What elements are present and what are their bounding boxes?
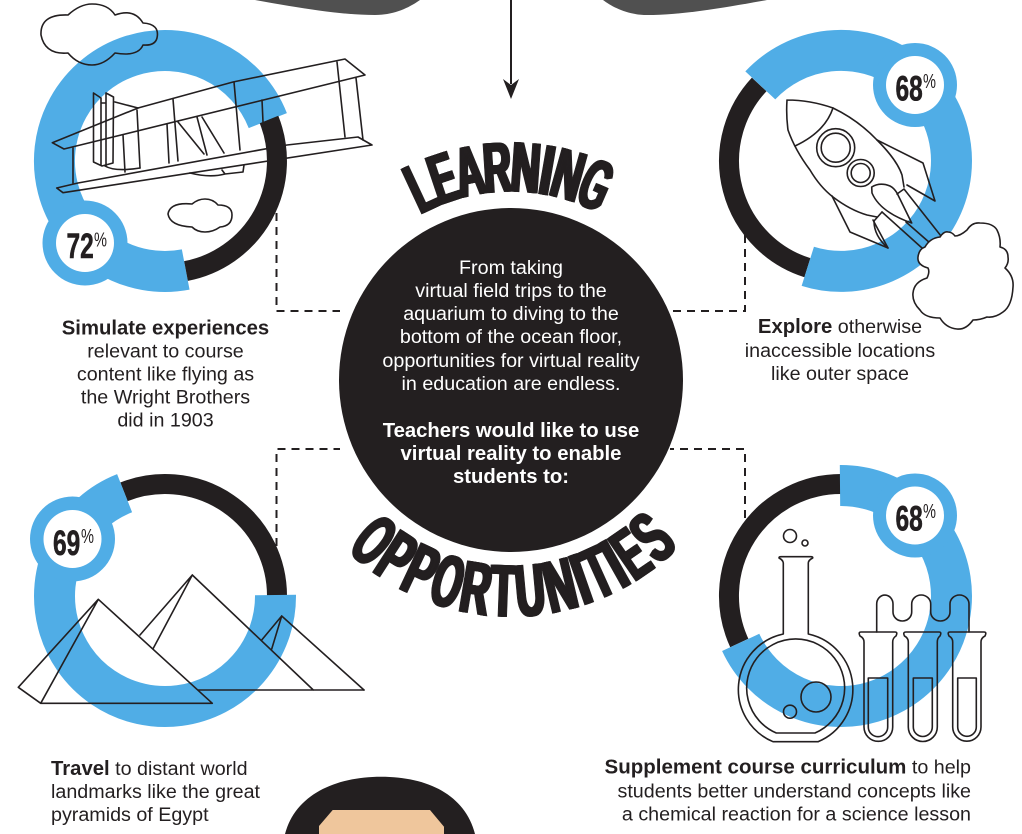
heading: OPPORTUNITIES <box>336 497 690 633</box>
heading: OPPORTUNITIES: P <box>363 515 431 600</box>
ring 68 percent black arc <box>729 484 841 643</box>
lead-in text: students to: <box>453 466 569 488</box>
icon: flask <box>738 530 853 742</box>
intro text: virtual field trips to the <box>415 280 607 302</box>
intro text: opportunities for virtual reality <box>382 350 640 372</box>
arrow pointing down <box>503 0 519 99</box>
text: simulate experiences: did in 1903 <box>117 410 214 432</box>
text: simulate experiences: the Wright Brothers <box>81 386 250 408</box>
text: travel <box>51 758 261 826</box>
badge 68 percent: % <box>923 70 936 93</box>
heading: OPPORTUNITIES: S <box>614 497 690 577</box>
icon: small cloud <box>168 199 232 232</box>
heading: OPPORTUNITIES: P <box>391 528 451 614</box>
lead-in text: Teachers would like to use <box>383 420 639 442</box>
text: supplement: students better understand concepts like <box>617 780 971 802</box>
text: simulate experiences: Simulate experiences <box>62 318 269 340</box>
intro text: From taking <box>459 257 563 279</box>
badge 72 percent: % <box>94 228 107 251</box>
ring 69 percent blue arc <box>55 493 276 707</box>
heading: OPPORTUNITIES: T <box>570 529 626 615</box>
text: supplement: Supplement course curriculum to help <box>605 756 971 778</box>
panel: simulate experiences ring <box>41 4 372 286</box>
badge 68 percent: 68 <box>896 501 923 539</box>
ring 68 percent blue arc <box>741 485 951 706</box>
panel: supplement ring <box>729 474 986 742</box>
badge 72 percent: 72 <box>66 228 94 266</box>
heading: OPPORTUNITIES: R <box>455 545 497 632</box>
lead-in text: virtual reality to enable <box>401 443 621 465</box>
badge 68 percent <box>873 43 957 127</box>
top dark shape right <box>603 0 767 15</box>
icon: pyramids <box>18 575 364 703</box>
intro text: in education are endless. <box>402 373 620 395</box>
text: travel: pyramids of Egypt <box>51 804 209 826</box>
ring 68 percent black arc <box>729 84 807 268</box>
icon: head at bottom <box>285 777 475 834</box>
heading: LEARNING <box>394 128 625 229</box>
icon: test tubes <box>859 595 986 742</box>
ring 72 percent black arc <box>186 120 277 271</box>
heading: LEARNING: N <box>544 134 592 218</box>
intro text <box>382 257 640 395</box>
badge 68 percent: 68 <box>896 71 923 109</box>
heading: OPPORTUNITIES: E <box>598 514 665 595</box>
text: simulate experiences: relevant to course <box>87 340 244 362</box>
panel: explore ring <box>729 43 1013 329</box>
badge 69 percent <box>30 496 115 582</box>
lead-in text <box>383 420 639 488</box>
intro text: aquarium to diving to the <box>403 303 619 325</box>
heading: LEARNING: E <box>419 138 468 221</box>
heading: LEARNING: G <box>567 142 625 227</box>
text: explore: inaccessible locations <box>745 340 935 362</box>
badge 69 percent: % <box>81 525 94 548</box>
intro text: bottom of the ocean floor, <box>400 326 622 348</box>
ring 68 percent blue arc <box>760 50 951 271</box>
icon: rocket <box>787 100 941 248</box>
text: explore <box>745 316 935 385</box>
heading: LEARNING: A <box>448 130 491 214</box>
badge 68 percent <box>873 474 957 558</box>
panel: center circle <box>339 208 683 552</box>
heading: LEARNING: I <box>535 131 560 211</box>
heading: LEARNING: L <box>394 147 449 229</box>
heading: OPPORTUNITIES: O <box>336 500 411 582</box>
badge 68 percent: % <box>923 500 936 523</box>
icon: top cloud <box>41 4 157 65</box>
ring 69 percent black arc <box>124 484 277 596</box>
badge 72 percent <box>42 200 128 286</box>
top dark shape left <box>255 0 420 15</box>
heading: LEARNING: R <box>481 128 514 209</box>
text: simulate experiences <box>62 318 269 432</box>
text: explore: Explore otherwise <box>758 316 922 338</box>
text: travel: Travel to distant world <box>51 758 248 780</box>
text: explore: like outer space <box>771 363 909 385</box>
dashed connectors <box>276 213 745 546</box>
heading: OPPORTUNITIES: T <box>490 549 517 633</box>
text: travel: landmarks like the great <box>51 781 261 803</box>
text: simulate experiences: content like flying as <box>77 364 254 386</box>
heading: OPPORTUNITIES: I <box>589 525 640 603</box>
text: supplement <box>605 756 971 826</box>
icon: exhaust cloud <box>913 223 1013 329</box>
panel: travel ring <box>18 484 364 707</box>
badge 69 percent: 69 <box>53 525 80 563</box>
text: supplement: a chemical reaction for a science lesson <box>622 804 971 826</box>
heading: OPPORTUNITIES: N <box>536 542 584 629</box>
icon: wright brothers airplane <box>52 59 372 193</box>
heading: LEARNING: N <box>509 128 543 209</box>
heading: OPPORTUNITIES: U <box>512 547 548 633</box>
heading: OPPORTUNITIES: I <box>561 538 600 620</box>
ring 72 percent blue arc <box>54 50 268 271</box>
heading: OPPORTUNITIES: O <box>422 539 474 626</box>
